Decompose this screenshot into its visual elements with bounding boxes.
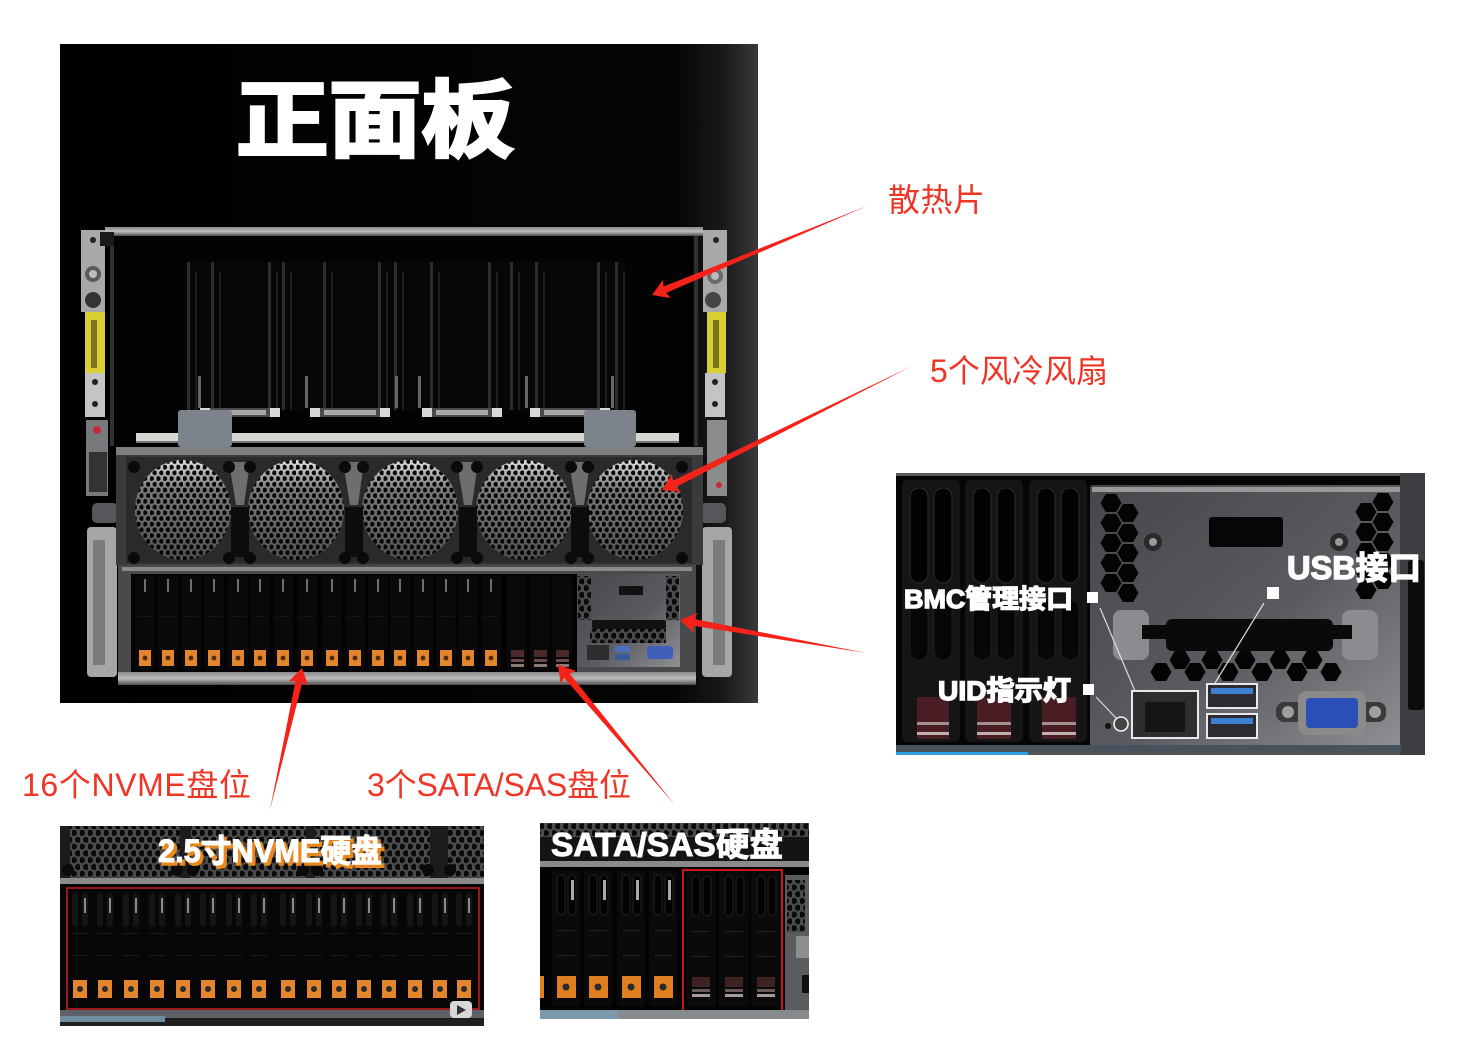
- NVMe drives in view: [540, 870, 677, 1006]
- chassis top bay with heatsinks: [105, 227, 703, 447]
- drive bay: [118, 565, 696, 685]
- 3 SATA/SAS drive bays: [507, 576, 572, 670]
- close-up drive trays: [902, 480, 1087, 742]
- five air-cooling fans: [116, 447, 703, 565]
- mesh strip with fan separators: [60, 826, 484, 878]
- arrow: fans: [662, 366, 912, 492]
- marker and leader: BMC: [1087, 592, 1135, 691]
- arrow: heat sink: [652, 206, 867, 298]
- drive row: [69, 889, 475, 1007]
- marker and leader: UID: [1083, 684, 1117, 719]
- heading: 2.5寸NVME硬盘: [158, 833, 382, 869]
- USB ports: [1207, 684, 1257, 738]
- UID LED: [1105, 717, 1128, 731]
- right rack ear: [700, 230, 732, 677]
- heading shadow: 2.5寸NVME硬盘: [161, 836, 385, 872]
- label: USB: USB接口: [1287, 550, 1421, 586]
- highlight frame: [683, 870, 782, 1011]
- label: five air-cooling fans: 5个风冷风扇: [930, 353, 1108, 389]
- label: 3 SATA/SAS bays: 3个SATA/SAS盘位: [367, 767, 631, 803]
- highlight frame: [67, 888, 479, 1009]
- SATA/SAS drives in view: [686, 871, 781, 1007]
- marker and leader: USB: [1215, 587, 1279, 683]
- IO plate edge: [785, 875, 809, 1010]
- left rack ear: [81, 230, 118, 677]
- arrow: rear IO plate: [680, 613, 866, 653]
- IO metal plate: [1090, 473, 1425, 755]
- bottom status bar: [896, 745, 1401, 755]
- label: 16 NVMe bays: 16个NVME盘位: [22, 767, 251, 803]
- heading: SATA/SAS硬盘: [551, 826, 783, 863]
- panel: rear IO close-up: [896, 473, 1425, 755]
- rear IO plate: [577, 574, 680, 667]
- panel: front panel server photo: [60, 44, 758, 703]
- panel: SATA/SAS drives close-up: [540, 823, 809, 1019]
- BMC RJ45 port: [1132, 691, 1198, 738]
- 16 NVMe drive bays: [135, 576, 501, 670]
- panel: NVMe drives close-up: [60, 826, 484, 1026]
- arrow: NVMe bays: [270, 668, 308, 810]
- label: UID: UID指示灯: [938, 676, 1071, 706]
- label: BMC: BMC管理接口: [904, 584, 1073, 614]
- arrow: SATA/SAS bays: [558, 665, 675, 805]
- VGA port: [1276, 691, 1386, 735]
- mesh strip: [540, 823, 809, 837]
- label: heat sink: 散热片: [888, 182, 985, 218]
- icon: play badge: [450, 1001, 472, 1018]
- title: front panel: 正面板: [236, 74, 514, 168]
